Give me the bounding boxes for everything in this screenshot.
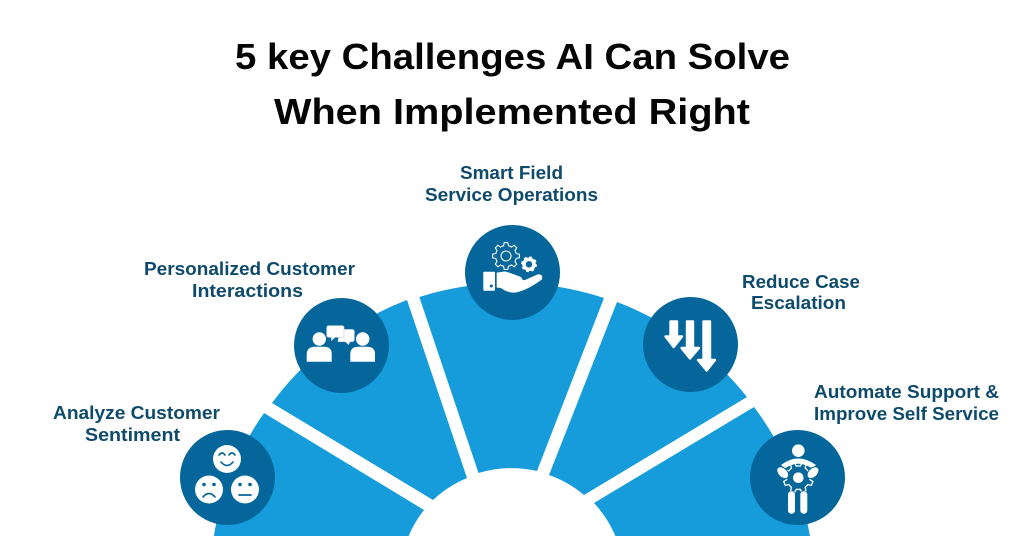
icon: sentiment faces <box>180 430 275 525</box>
label: reduce case escalation: Reduce Case <box>742 272 860 292</box>
label: automate support and improve self service <box>814 382 999 424</box>
label: automate support and improve self service: Automate Support & <box>814 382 999 402</box>
title: 5 key Challenges AI Can Solve <box>235 36 790 77</box>
wheel segment 2 <box>272 300 467 500</box>
icon: people talking <box>294 298 389 393</box>
label: analyze customer sentiment: Sentiment <box>85 425 180 445</box>
label: personalized customer interactions: Interactions <box>192 281 303 301</box>
wheel segment 1 <box>214 413 424 536</box>
label: personalized customer interactions: Personalized Customer <box>144 259 355 279</box>
title <box>235 36 790 132</box>
label: analyze customer sentiment: Analyze Customer <box>53 403 220 423</box>
icon: gears over hand <box>465 225 560 320</box>
wheel segment 4 <box>549 302 747 495</box>
title: When Implemented Right <box>274 91 750 132</box>
wheel segment 3 <box>419 283 604 473</box>
icon: person holding gear <box>750 430 845 525</box>
label: automate support and improve self service: Improve Self Service <box>814 404 999 424</box>
label: smart field service operations: Service Operations <box>425 185 598 205</box>
semicircle wheel <box>214 283 810 536</box>
label: smart field service operations <box>425 163 598 205</box>
icon: down arrows <box>643 297 738 392</box>
label: smart field service operations: Smart Field <box>460 163 563 183</box>
label: personalized customer interactions <box>144 259 355 301</box>
label: analyze customer sentiment <box>53 403 220 445</box>
label: reduce case escalation: Escalation <box>751 293 846 313</box>
wheel segment 5 <box>594 407 810 536</box>
label: reduce case escalation <box>742 272 860 313</box>
